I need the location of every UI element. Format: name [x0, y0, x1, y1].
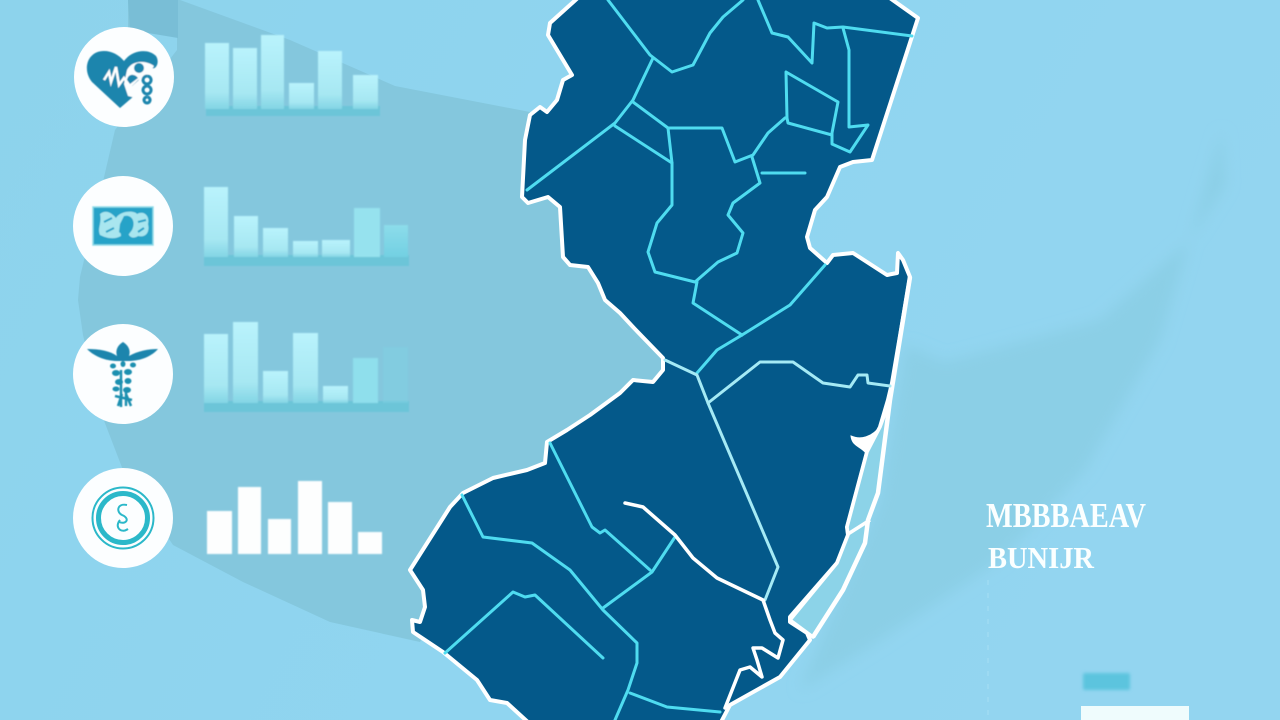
white legend bar — [1081, 706, 1189, 720]
label line 1: MBBBAEAV — [986, 496, 1146, 535]
dashed guide line — [987, 580, 989, 720]
county borders: pale — [665, 360, 890, 600]
row 2: banknote — [73, 176, 409, 276]
legend label — [986, 496, 1146, 575]
icon: heart with pulse — [74, 27, 174, 127]
background silhouette: left landmass — [78, 0, 680, 642]
barrier island strip — [790, 277, 910, 637]
bar chart 4 — [207, 481, 382, 554]
label line 2: BUNIJR — [988, 540, 1095, 575]
county borders: cyan — [445, 0, 912, 720]
county border: white river — [625, 503, 783, 708]
bar chart 3 — [204, 322, 409, 412]
map fill and outline — [410, 0, 918, 720]
icon: caduceus — [73, 324, 173, 424]
icon: coin — [73, 468, 173, 568]
map of counties — [410, 0, 918, 720]
background silhouette: right landmass — [800, 130, 1225, 690]
small cyan legend bar — [1083, 673, 1130, 690]
row 3: caduceus — [73, 322, 409, 424]
row 1: health — [74, 27, 380, 127]
icon: banknote — [73, 176, 173, 276]
bar chart 2 — [204, 187, 409, 266]
row 4: coin — [73, 468, 382, 568]
bar chart 1 — [205, 35, 380, 116]
